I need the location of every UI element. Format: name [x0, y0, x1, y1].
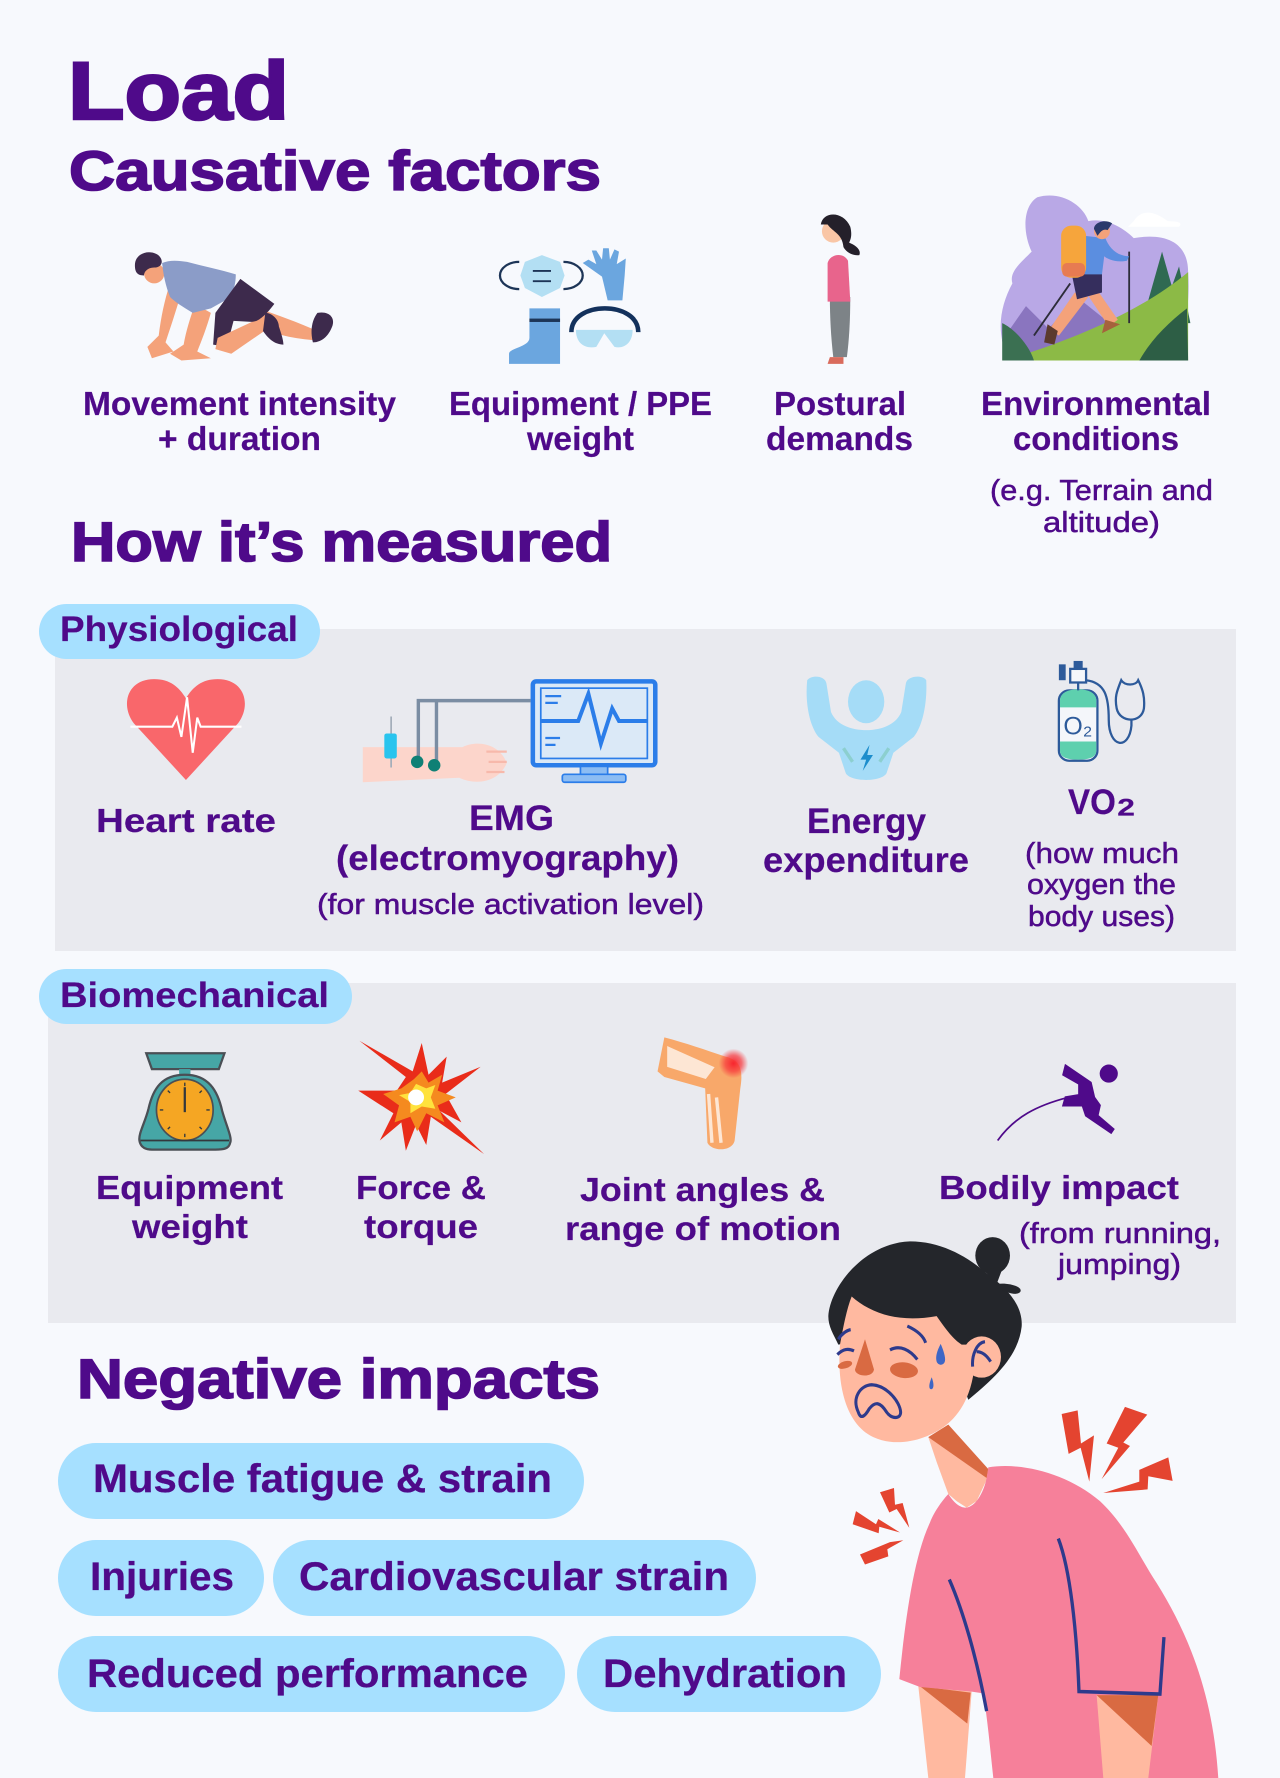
- label: postural demands: Postural: [774, 385, 906, 422]
- label: postural demands: demands: [766, 420, 913, 457]
- pain bolts: upper back: [1062, 1407, 1173, 1493]
- label: movement intensity: Movement intensity: [83, 385, 397, 422]
- icon: oxygen tank: [1059, 661, 1144, 761]
- label: equipment weight: weight: [131, 1208, 248, 1245]
- pill: dehydration: [577, 1636, 881, 1712]
- facial features: [837, 1326, 991, 1418]
- heading: How it's measured: How it’s measured: [71, 510, 612, 573]
- pill: dehydration: Dehydration: [603, 1652, 847, 1696]
- note: terrain and altitude: altitude): [1043, 507, 1160, 539]
- pill: Physiological: Physiological: [60, 610, 298, 649]
- note: from running, jumping: jumping): [1057, 1249, 1181, 1281]
- section: causative factors: [83, 195, 1213, 539]
- pill: reduced performance: [58, 1636, 565, 1712]
- icon: heart: [127, 679, 245, 780]
- label: environmental conditions: [981, 385, 1211, 457]
- label: equipment / PPE weight: weight: [526, 420, 634, 457]
- icon: scale: [139, 1053, 231, 1150]
- pill: injuries: [58, 1540, 264, 1616]
- label: energy expenditure: Energy: [807, 802, 927, 841]
- label: movement intensity: + duration: [158, 420, 321, 457]
- label: environmental conditions: Environmental: [981, 385, 1211, 422]
- pill: Biomechanical: Biomechanical: [60, 976, 329, 1015]
- pill: muscle fatigue and strain: Muscle fatigue & strain: [93, 1457, 552, 1501]
- pill: reduced performance: Reduced performance: [87, 1652, 528, 1696]
- label: EMG: [336, 799, 679, 878]
- label: movement intensity: [83, 385, 397, 457]
- panel: biomechanical: [39, 969, 1236, 1323]
- pill: cardiovascular strain: Cardiovascular strain: [299, 1555, 729, 1599]
- label: equipment weight: [96, 1169, 283, 1245]
- icon: oxygen tank: O₂: [1063, 713, 1092, 741]
- label: EMG: (electromyography): [336, 839, 679, 878]
- hair: [828, 1241, 1022, 1400]
- panel: physiological: [39, 604, 1236, 951]
- icon: PPE equipment: [500, 248, 638, 364]
- hair bun: [975, 1237, 1021, 1294]
- icon: jumping figure: [998, 1065, 1118, 1141]
- illustration: person in pain: [828, 1237, 1218, 1778]
- label: joint angles and range of motion: [565, 1171, 841, 1247]
- label: postural demands: [766, 385, 913, 457]
- label: VO2: VO₂: [1068, 772, 1136, 825]
- label: energy expenditure: expenditure: [763, 841, 969, 880]
- label: heart rate: Heart rate: [96, 802, 276, 839]
- icon: standing woman: [821, 215, 860, 364]
- pain bolts: chest: [853, 1488, 909, 1565]
- icon: knee joint: [658, 1037, 748, 1149]
- icon: hiker in landscape: [1001, 195, 1190, 361]
- pill: muscle fatigue and strain: [58, 1443, 584, 1519]
- heading: Causative factors: Causative factors: [69, 139, 601, 202]
- label: energy expenditure: [763, 802, 969, 880]
- pill: Physiological: [39, 604, 320, 659]
- label: bodily impact: Bodily impact: [939, 1169, 1179, 1206]
- note: terrain and altitude: [990, 475, 1213, 539]
- label: joint angles and range of motion: Joint angles &: [580, 1171, 825, 1208]
- note: from running, jumping: (from running,: [1019, 1218, 1221, 1250]
- pill: injuries: Injuries: [90, 1555, 234, 1599]
- label: joint angles and range of motion: range of motion: [565, 1210, 841, 1247]
- note: muscle activation level: (for muscle activation level): [317, 889, 704, 921]
- face: [839, 1297, 975, 1442]
- note: how much oxygen the body uses: [1025, 838, 1179, 933]
- note: how much oxygen the body uses: body uses): [1028, 901, 1175, 933]
- icon: energy torso: [807, 677, 926, 780]
- icon: explosion: [358, 1041, 484, 1154]
- label: equipment weight: Equipment: [96, 1169, 283, 1206]
- pill: Biomechanical: [39, 969, 352, 1024]
- label: equipment / PPE weight: Equipment / PPE: [449, 385, 712, 422]
- label: force and torque: torque: [364, 1208, 478, 1245]
- note: how much oxygen the body uses: (how much: [1025, 838, 1179, 870]
- icon: runner: [135, 252, 333, 361]
- note: how much oxygen the body uses: oxygen the: [1027, 869, 1176, 901]
- label: environmental conditions: conditions: [1013, 420, 1179, 457]
- note: from running, jumping: [1019, 1218, 1221, 1281]
- label: EMG: EMG: [469, 799, 554, 838]
- pill: cardiovascular strain: [273, 1540, 756, 1616]
- note: terrain and altitude: (e.g. Terrain and: [990, 475, 1213, 507]
- label: equipment / PPE weight: [449, 385, 712, 457]
- title: Load: Load: [68, 46, 289, 137]
- icon: EMG monitor and wrist: [363, 681, 655, 782]
- heading: Negative impacts: Negative impacts: [77, 1347, 600, 1410]
- ear: [962, 1336, 1001, 1378]
- label: force and torque: [356, 1169, 486, 1245]
- label: force and torque: Force &: [356, 1169, 486, 1206]
